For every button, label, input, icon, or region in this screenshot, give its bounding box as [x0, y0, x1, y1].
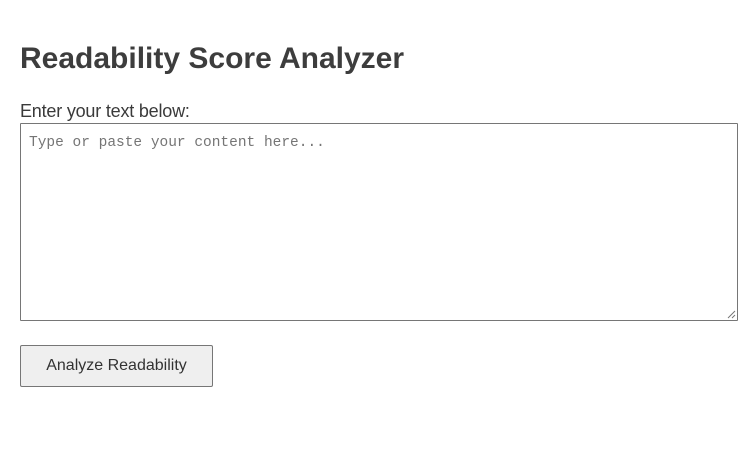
title: Readability Score Analyzer [20, 42, 404, 75]
text area: Type or paste your content here... [29, 135, 325, 151]
text area [20, 123, 738, 321]
input label: Enter your text below: [20, 101, 190, 121]
analyze button: Analyze Readability [46, 357, 187, 374]
analyze button [20, 345, 213, 387]
